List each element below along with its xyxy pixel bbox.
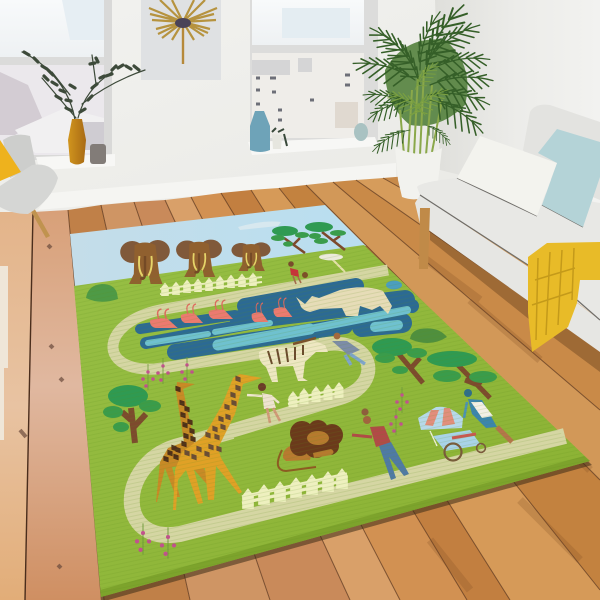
sky trees	[271, 222, 346, 253]
rug bottom border	[100, 456, 590, 597]
wood floor planks	[0, 175, 600, 600]
elephants	[120, 240, 271, 284]
ice cream cart	[418, 407, 485, 460]
sofa	[415, 105, 600, 372]
bush right	[410, 328, 447, 343]
rug edge shadow	[70, 207, 592, 600]
blue vase	[250, 111, 270, 152]
sofa back	[523, 105, 600, 200]
chair seat	[0, 165, 58, 214]
bush top left	[86, 284, 118, 302]
back wall	[0, 0, 600, 215]
palm foliage core	[385, 39, 468, 126]
palm dark fronds	[350, 0, 494, 158]
right wall	[435, 0, 600, 210]
glass vase on sill	[354, 123, 368, 141]
palm plant	[350, 0, 494, 158]
top fence	[160, 272, 262, 296]
sofa seat	[417, 178, 600, 320]
flamingos	[150, 298, 292, 328]
front fence	[242, 468, 348, 509]
gold vase	[68, 119, 86, 164]
white plant pot	[395, 147, 442, 199]
rug pile texture	[74, 245, 590, 597]
right window	[248, 0, 378, 155]
small potted plant	[272, 128, 287, 149]
zebra	[259, 338, 328, 382]
sofa front side	[415, 195, 600, 352]
left window	[0, 0, 115, 170]
armchair	[0, 135, 58, 238]
grey cup	[90, 144, 106, 164]
flowers	[135, 357, 409, 559]
man carrying child	[352, 408, 409, 480]
sofa shadow on floor	[430, 224, 600, 372]
skirting board	[38, 163, 396, 210]
girl near giraffe	[247, 383, 280, 423]
picture: golden palm fan	[141, 0, 221, 80]
tree one on the right	[372, 338, 427, 383]
giraffe front	[173, 374, 262, 510]
yellow knitted throw	[528, 242, 600, 352]
man by zebra	[332, 333, 365, 365]
window vase plant	[22, 52, 145, 120]
rug	[70, 205, 592, 600]
white cloud	[238, 222, 281, 230]
palm stems	[400, 70, 442, 155]
yellow cushion	[0, 140, 21, 181]
ice cream vendor	[464, 389, 512, 442]
mid fence	[288, 382, 344, 407]
chair back	[3, 135, 36, 178]
small pond	[386, 280, 402, 290]
lake	[140, 286, 412, 352]
rhino	[296, 287, 392, 316]
tree two on the right	[427, 351, 497, 398]
sofa wooden leg	[419, 208, 430, 269]
sofa seams	[420, 178, 600, 320]
white cushion	[457, 136, 557, 216]
rug grass panel	[74, 245, 590, 597]
giraffe back	[156, 382, 215, 502]
tree on the left	[103, 385, 161, 443]
chair leg	[29, 206, 50, 238]
road	[113, 270, 565, 535]
lion	[278, 420, 343, 471]
palm light leaves	[383, 58, 452, 122]
sign post	[319, 254, 345, 272]
teal cushion	[538, 129, 600, 227]
side table at left edge	[0, 266, 8, 440]
child with red shirt	[288, 261, 308, 284]
rug sky panel	[70, 205, 366, 287]
